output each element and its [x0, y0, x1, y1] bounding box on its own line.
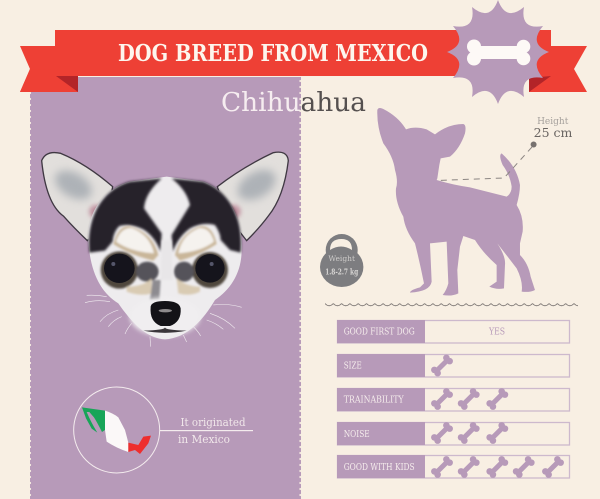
height indicator: 25 cm: [534, 125, 573, 140]
weight icon: Weight: [328, 254, 355, 263]
wavy divider: [325, 302, 578, 308]
heading: dog breed from mexico: DOG BREED FROM MEXICO: [118, 39, 428, 67]
row: good first dog: [337, 320, 570, 343]
height indicator: Height: [537, 117, 569, 127]
breed name: Chihuahua: [221, 88, 366, 118]
row: good with kids: GOOD WITH KIDS: [344, 462, 415, 473]
right ear: [217, 152, 288, 241]
height indicator: [436, 117, 573, 180]
row: trainability: TRAINABILITY: [344, 394, 404, 406]
map: red: [128, 436, 151, 454]
origin text: in Mexico: [178, 432, 230, 446]
panel: breed portrait: [28, 77, 302, 499]
weight icon: 1.8-2.7 kg: [325, 266, 358, 276]
origin leader line: [160, 430, 253, 431]
row: size: [337, 353, 570, 378]
row: noise: [337, 421, 570, 445]
row: noise: NOISE: [344, 429, 370, 440]
badge: starburst with bone: [447, 0, 549, 104]
black head markings: [89, 178, 241, 253]
map: green: [82, 407, 105, 433]
nose: [143, 301, 187, 333]
row: trainability: [337, 387, 570, 411]
origin text: It originated: [180, 415, 246, 429]
origin text: [178, 415, 246, 446]
row: good first dog: YES: [488, 326, 505, 338]
head: [88, 177, 242, 339]
muzzle: [130, 297, 200, 336]
dog silhouette: [377, 108, 535, 296]
row: good with kids: [337, 455, 570, 479]
map circle: mexico: [74, 387, 160, 473]
eyes: [104, 254, 225, 283]
left ear: [42, 153, 113, 241]
weight icon: [320, 234, 363, 287]
brow markings: [101, 226, 228, 300]
ribbon banner: [20, 30, 587, 92]
map: white: [105, 411, 128, 452]
row: good first dog: GOOD FIRST DOG: [344, 326, 415, 338]
row: size: SIZE: [344, 360, 362, 372]
illustration: chihuahua face: [42, 152, 288, 347]
whiskers: [85, 295, 242, 347]
